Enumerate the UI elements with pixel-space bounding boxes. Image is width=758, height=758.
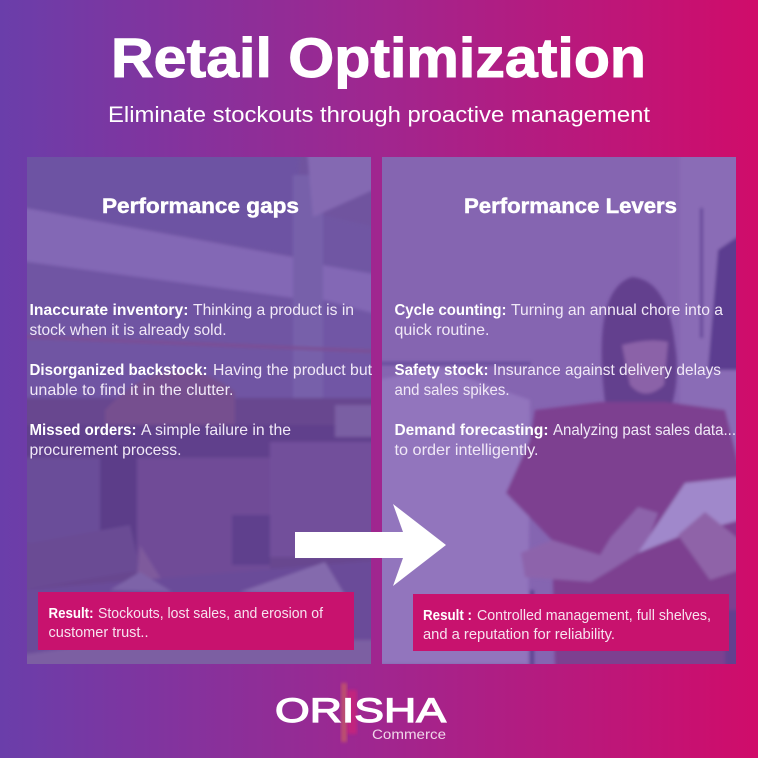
item: missed orders: A simple failure in the [141,422,291,439]
item: disorganized backstock: Having the product but [213,362,373,379]
callout: result of gaps: Result: [48,605,94,622]
callout: result of levers: and a reputation for reliability. [423,626,615,643]
item: inaccurate inventory [30,302,354,339]
logo: Orisha Commerce: ORISHA [275,692,446,730]
heading: performance gaps: Performance gaps [102,194,299,218]
callout: result of gaps: customer trust.. [48,624,148,641]
item: demand forecasting: Analyzing past sales data... [553,422,736,439]
item: demand forecasting: Demand forecasting: [394,422,548,439]
item: missed orders [30,422,291,459]
item: disorganized backstock [30,362,373,399]
item: disorganized backstock: Disorganized backstock: [30,362,208,379]
item: missed orders: Missed orders: [30,422,136,439]
subtitle: Eliminate stockouts through proactive management [108,102,651,127]
arrow: gaps to levers [295,504,446,586]
item: demand forecasting: to order intelligently. [394,442,538,459]
item: cycle counting: quick routine. [394,322,490,339]
logo: Orisha Commerce: Commerce [372,727,446,742]
item: cycle counting: Turning an annual chore into a [511,302,723,319]
item: inaccurate inventory: Inaccurate inventory: [30,302,188,319]
panel: performance gaps [20,150,380,668]
heading: performance levers: Performance Levers [464,194,677,218]
callout: result of levers: Controlled management, full shelves, [477,607,711,624]
item: inaccurate inventory: Thinking a product is in [193,302,354,319]
item: safety stock: Safety stock: [394,362,488,379]
title: Retail Optimization [111,26,646,89]
item: cycle counting: Cycle counting: [394,302,506,319]
item: demand forecasting [394,422,736,459]
callout: result of gaps [38,592,354,650]
callout: result of levers [413,594,729,651]
warehouse photo with purple overlay [20,150,380,668]
item: safety stock [394,362,721,399]
callout: result of gaps: Stockouts, lost sales, and erosion of [98,605,324,622]
logo: Orisha Commerce [275,683,446,742]
item: missed orders: procurement process. [30,442,182,459]
item: safety stock: Insurance against delivery delays [493,362,721,379]
item: cycle counting [394,302,723,339]
item: inaccurate inventory: stock when it is already sold. [30,322,226,339]
callout: result of levers: Result : [423,607,472,624]
item: safety stock: and sales spikes. [394,382,510,399]
panel: performance levers [376,150,740,668]
shop photo with purple overlay [376,150,740,668]
item: disorganized backstock: unable to find it in the clutter. [30,382,234,399]
